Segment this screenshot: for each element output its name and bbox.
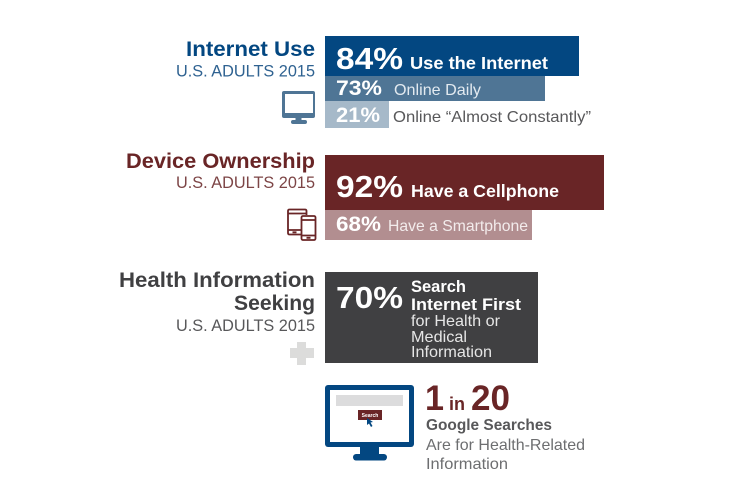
text: google searches description	[426, 417, 585, 473]
statistic: 1 in 20	[425, 379, 510, 418]
heading: health information seeking: Health Information	[119, 269, 315, 292]
bar: 84% use the internet	[325, 36, 579, 76]
text: google searches description: Google Searches	[426, 417, 552, 434]
bar: 70% search internet first: Medical	[411, 329, 467, 346]
panel: internet use	[176, 36, 591, 128]
statistic: 1 in 20: in	[449, 394, 465, 414]
icon: tablet and smartphone	[288, 210, 316, 240]
bar: 92% have a cellphone	[325, 155, 604, 210]
bar: 68% have a smartphone	[325, 210, 532, 240]
bar: 73% online daily: Online Daily	[394, 82, 481, 99]
bar: 84% use the internet: Use the Internet	[410, 53, 548, 73]
bar: 70% search internet first: Information	[411, 344, 492, 361]
bar: 21% online almost constantly: 21%	[336, 103, 380, 127]
icon: desktop monitor	[282, 91, 315, 124]
bar: 70% search internet first: Search	[411, 277, 466, 296]
bar: 70% search internet first	[325, 272, 538, 363]
panel: device ownership	[126, 150, 604, 240]
heading: internet use: U.S. ADULTS 2015	[176, 62, 315, 80]
panel: google searches	[325, 379, 585, 473]
bar: 70% search internet first: 70%	[336, 280, 403, 315]
text: google searches description: Information	[426, 456, 508, 473]
bar: 68% have a smartphone: 68%	[336, 212, 381, 236]
heading: internet use: Internet Use	[186, 38, 315, 61]
heading: internet use	[176, 38, 315, 80]
bar: 21% online almost constantly: Online “Almost Constantly”	[393, 109, 591, 126]
heading: health information seeking: Seeking	[234, 292, 315, 315]
bar: 70% search internet first: for Health or	[411, 313, 501, 330]
panel: health information seeking	[119, 269, 538, 365]
bar: 68% have a smartphone: Have a Smartphone	[388, 218, 528, 235]
icon: medical cross	[290, 342, 314, 365]
text: google searches description: Are for Health-Related	[426, 437, 585, 454]
statistic: 1 in 20: 20	[471, 379, 510, 418]
icon: monitor with search box	[325, 385, 414, 460]
heading: device ownership: Device Ownership	[126, 150, 315, 173]
heading: health information seeking: U.S. ADULTS 2015	[176, 317, 315, 335]
bar: 92% have a cellphone: Have a Cellphone	[411, 181, 559, 201]
bar: 21% online almost constantly	[325, 101, 591, 128]
bar: 73% online daily	[325, 76, 545, 101]
bar: 70% search internet first: Internet First	[411, 295, 521, 314]
bar: 84% use the internet: 84%	[336, 41, 403, 76]
icon: monitor with search box: Search	[362, 413, 378, 419]
heading: health information seeking	[119, 269, 315, 335]
statistic: 1 in 20: 1	[425, 379, 444, 418]
bar: 73% online daily: 73%	[336, 76, 382, 100]
bar: 92% have a cellphone: 92%	[336, 169, 403, 204]
heading: device ownership: U.S. ADULTS 2015	[176, 174, 315, 192]
heading: device ownership	[126, 150, 315, 192]
